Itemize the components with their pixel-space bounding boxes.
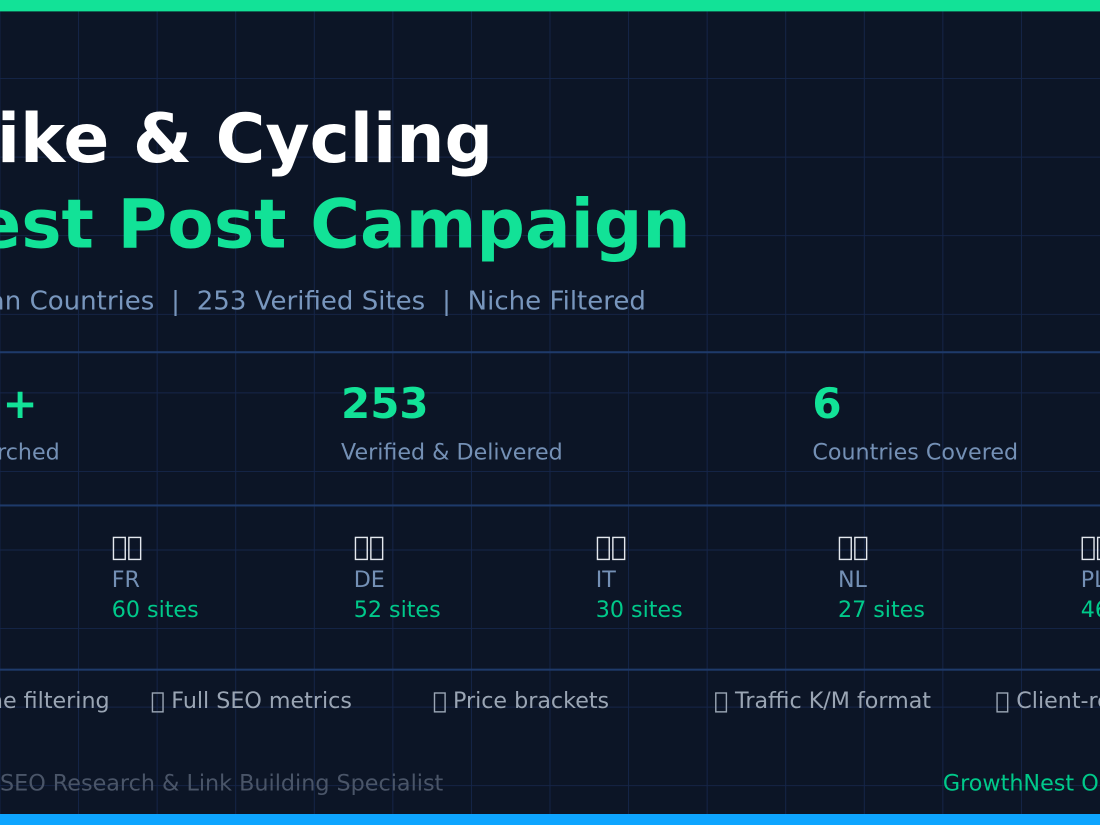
country: Italy: 30 sites	[596, 597, 683, 623]
country: Netherlands: NL	[838, 567, 868, 593]
top accent bar	[0, 0, 1100, 11]
stat: verified and delivered	[341, 379, 563, 466]
country: Netherlands	[838, 537, 925, 623]
stat: countries covered	[812, 379, 1018, 466]
country row	[112, 537, 1100, 623]
country: Germany: DE	[354, 567, 385, 593]
feature row	[0, 688, 1100, 714]
country: France: FR	[112, 567, 140, 593]
stat: verified and delivered: Verified & Delivered	[341, 440, 563, 466]
stat: countries covered: Countries Covered	[812, 440, 1018, 466]
bottom accent bar	[0, 814, 1100, 825]
feature: price brackets: Price brackets	[453, 688, 609, 714]
country: Germany	[354, 537, 441, 623]
stat: sites researched	[0, 379, 60, 466]
feature: traffic format: Traffic K/M format	[734, 688, 931, 714]
country: Poland	[1081, 537, 1100, 623]
stat: verified and delivered: 253	[341, 379, 429, 428]
country: Italy	[596, 537, 683, 623]
country: Germany: 52 sites	[354, 597, 441, 623]
title	[0, 99, 691, 263]
stat: countries covered: 6	[812, 379, 842, 428]
country: Italy: IT	[596, 567, 616, 593]
country: France	[112, 537, 199, 623]
stat: sites researched: +	[3, 379, 38, 428]
feature: full SEO metrics: Full SEO metrics	[171, 688, 352, 714]
stats row	[0, 379, 1018, 466]
country: Netherlands: 27 sites	[838, 597, 925, 623]
footer left text: SEO Research & Link Building Specialist	[0, 770, 444, 796]
country: France: 60 sites	[112, 597, 199, 623]
